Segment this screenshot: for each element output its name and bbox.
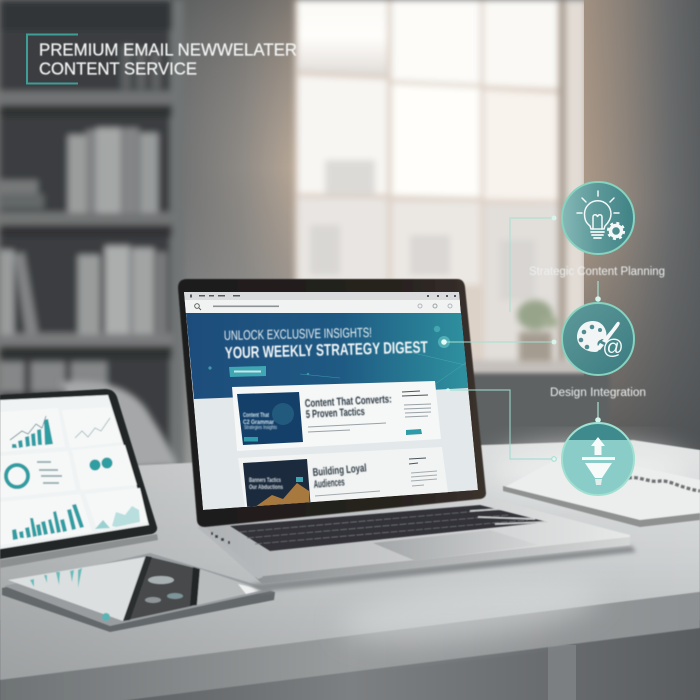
card 2 body lines (315, 458, 437, 496)
top shelf books (121, 45, 161, 90)
glowing node (438, 336, 450, 348)
connector: design to screen (444, 341, 554, 343)
trackpad (373, 530, 538, 561)
area chart (112, 506, 140, 527)
right wall (584, 0, 700, 450)
icon: funnel optimization (560, 420, 636, 495)
card 1 image: Strategies Insights (244, 425, 277, 431)
lower wall under the window (470, 373, 610, 448)
label: strategic content planning: Strategic Content Planning (529, 266, 665, 278)
card 2 image: Banners Tactics (249, 478, 281, 484)
chair behind tablet (60, 381, 178, 470)
tablet with dashboard (0, 389, 158, 568)
line charts (10, 416, 46, 440)
soft highlight (338, 566, 602, 654)
desk leg (548, 645, 576, 700)
reflected bars (30, 568, 82, 588)
connector lines between laptop and icons (438, 216, 601, 461)
gear (608, 223, 624, 239)
card 2 headline: Audiences (313, 476, 345, 491)
funnel (582, 457, 615, 460)
banner button (229, 366, 266, 377)
icon: strategic content planning (562, 182, 634, 254)
keyboard (230, 505, 547, 551)
card 2 image: Our Abductions (249, 485, 283, 491)
card 2 headline (312, 462, 367, 491)
card 2 headline: Building Loyal (312, 462, 367, 479)
desk top (0, 440, 700, 680)
tablet body (0, 389, 157, 559)
up arrow (591, 437, 605, 455)
laptop shadow (250, 546, 636, 592)
window with panes (295, 0, 588, 380)
lightbulb (577, 191, 619, 238)
bar chart bottom (12, 504, 84, 540)
at sign: @ (602, 336, 624, 359)
chart panels (0, 407, 148, 545)
connector: optimization to card (447, 390, 554, 459)
title block (27, 34, 297, 84)
laptop screen (184, 292, 478, 515)
notebook on desk (503, 452, 700, 527)
desk (0, 440, 700, 700)
lower shelf books (0, 246, 167, 335)
laptop (178, 279, 636, 592)
donut chart (6, 465, 28, 487)
banner headings (224, 326, 428, 360)
browser address bar (184, 300, 460, 313)
soft buildings outside (310, 160, 535, 300)
shade on left of the desk (0, 440, 700, 680)
plant on sill (517, 300, 559, 362)
spiral binding (628, 478, 700, 491)
card 1 headline: 5 Proven Tactics (306, 406, 365, 421)
wall beside bookshelf (170, 0, 300, 480)
article card 2 (238, 447, 448, 507)
banner headings: YOUR WEEKLY STRATEGY DIGEST (225, 338, 428, 362)
card 1 image: Content That (243, 413, 269, 419)
article card 1 (232, 381, 441, 451)
connector: design to optimization (597, 402, 599, 420)
card 1 headline: Content That Converts: (305, 393, 392, 410)
title text (39, 40, 297, 78)
floor under desk (0, 620, 700, 700)
paintbrush (602, 322, 620, 343)
flat tablet on desk (2, 553, 275, 632)
tablet screen (0, 395, 149, 549)
browser menu bar (184, 292, 460, 300)
connector: planning to design (597, 281, 599, 299)
palette (577, 321, 606, 352)
connector: planning to screen (510, 218, 554, 312)
legend (37, 461, 62, 484)
title bracket (27, 34, 78, 84)
card 1 headline (304, 395, 392, 419)
middle shelf books (0, 128, 158, 213)
card 1 image: C2 Grammar (243, 420, 275, 426)
hero banner (186, 313, 469, 399)
ports (211, 532, 230, 544)
laptop base (198, 497, 630, 584)
label: design integration: Design Integration (550, 387, 646, 399)
reflected screen (8, 557, 145, 621)
title text: PREMIUM EMAIL NEWWELATER (39, 40, 297, 60)
tablet shadow edge (0, 534, 158, 568)
network nodes in banner (208, 326, 467, 384)
laptop lid (178, 279, 486, 527)
card 1 image (237, 392, 303, 445)
highlight behind notebook (490, 446, 690, 494)
icon: design integration (562, 303, 634, 375)
bookshelf (0, 0, 184, 480)
banner headings: UNLOCK EXCLUSIVE INSIGHTS! (224, 325, 372, 343)
title text: CONTENT SERVICE (39, 58, 197, 78)
bar chart top (12, 419, 53, 448)
card 1 body lines (308, 391, 431, 432)
card 2 image (243, 459, 310, 507)
bottom shelf boxes (0, 362, 107, 392)
ring gauges (90, 458, 112, 470)
